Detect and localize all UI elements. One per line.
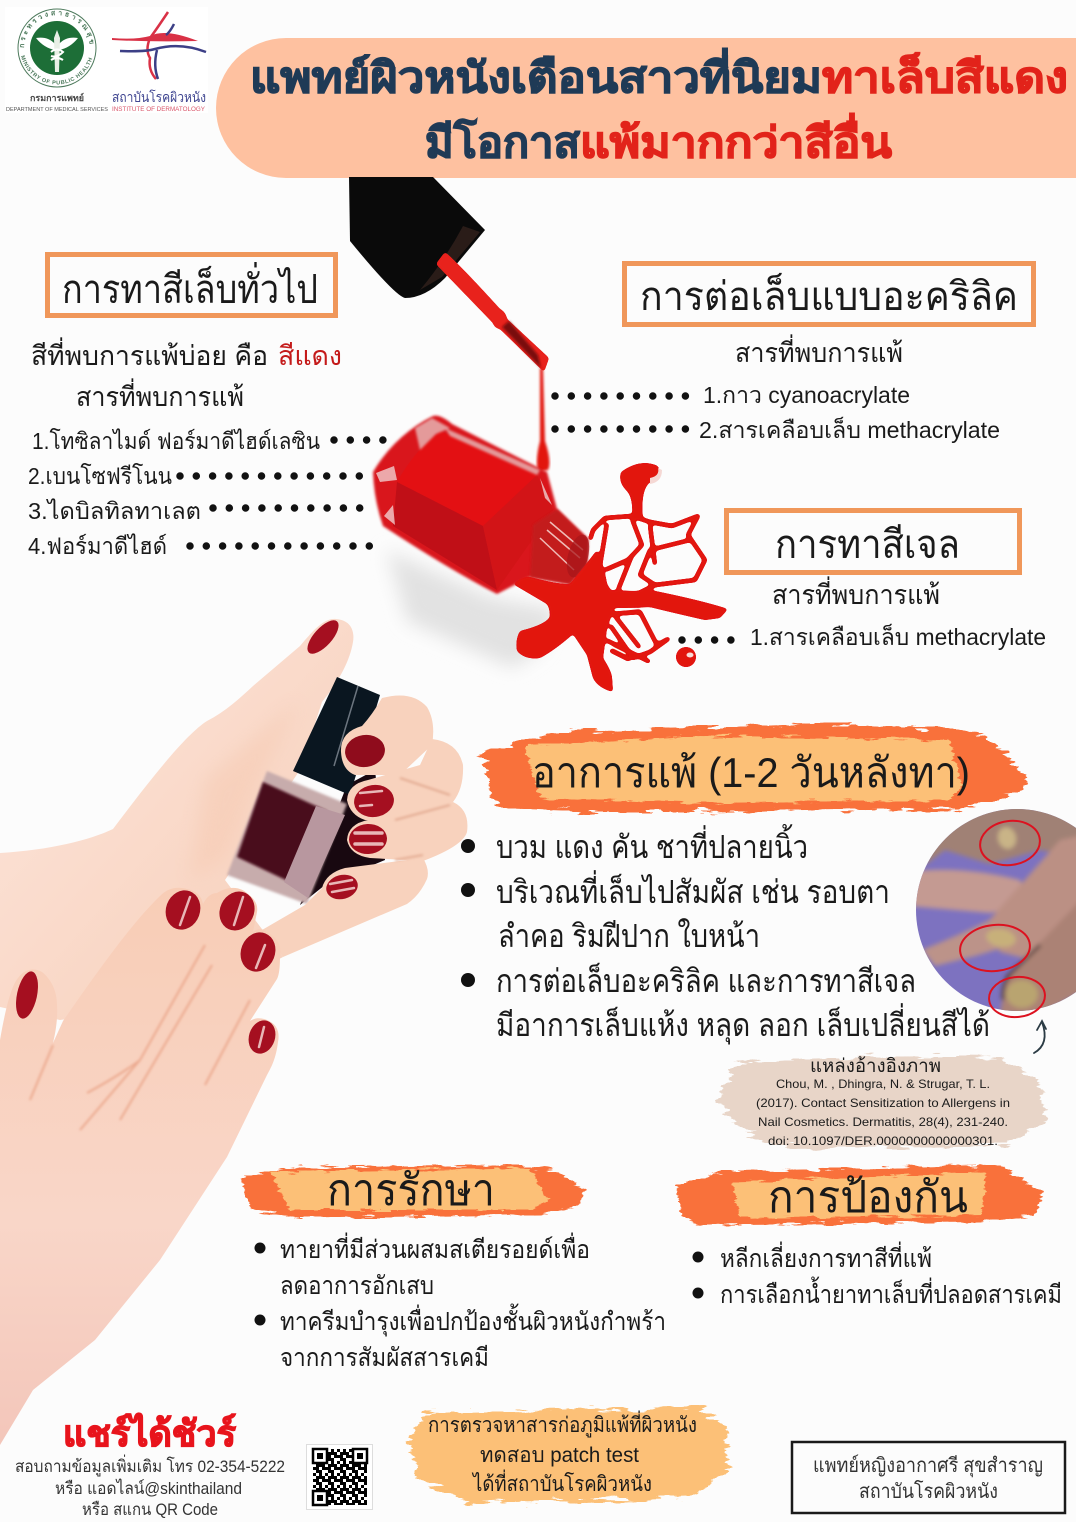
logo: ministry of public health: กรมการแพทย์ (30, 92, 84, 103)
title banner: มีโอกาส (425, 118, 580, 166)
image reference (717, 1056, 1048, 1148)
treatment list: ทายาที่มีส่วนผสมสเตียรอยด์เพื่อ (280, 1232, 590, 1264)
dark shadow between fingers (300, 770, 385, 905)
callout: patch test: ได้ที่สถาบันโรคผิวหนัง (471, 1469, 652, 1496)
spill: main blob (513, 550, 617, 692)
nail highlights (180, 791, 382, 1047)
palm shading (190, 700, 300, 880)
treatment list (254, 1232, 666, 1372)
symptoms list (461, 824, 990, 1045)
text block: general polish allergens: 4.ฟอร์มาดีไฮด์ (28, 533, 167, 559)
banner: prevention heading (676, 1165, 1043, 1225)
text block: general polish allergens (28, 337, 342, 559)
text block: general polish allergens: 1.โทซิลาไมด์ ฟอร์มาดีไฮด์เลซิน (32, 428, 320, 454)
image reference: แหล่งอ้างอิงภาพ (810, 1056, 941, 1077)
text block: acrylic allergens: 1.กาว cyanoacrylate (703, 382, 910, 408)
callout: patch test: ทดสอบ patch test (480, 1444, 639, 1467)
text block: general polish allergens: 3.ไดบิลทิลทาเลต (28, 498, 201, 524)
finger creases (30, 945, 250, 1130)
logo: ministry of public health: DEPARTMENT OF MEDICAL SERVICES (6, 107, 108, 113)
footer contact block: หรือ สแกน QR Code (82, 1500, 218, 1519)
spill: top drop (620, 463, 660, 520)
dotted leaders (180, 396, 733, 640)
title banner: แพทย์ผิวหนังเตือนสาวที่นิยม (250, 48, 822, 101)
finger shading (395, 778, 450, 860)
treatment list: ทาครีมบำรุงเพื่อปกป้องชั้นผิวหนังกำพร้า (280, 1303, 666, 1337)
footer contact block (15, 1412, 285, 1519)
author box: สถาบันโรคผิวหนัง (859, 1480, 998, 1503)
QR code (306, 1444, 372, 1510)
prevention list (692, 1241, 1062, 1309)
text block: gel allergens (750, 576, 1046, 650)
brush cap (349, 177, 485, 298)
logo: institute of dermatology (112, 12, 206, 113)
text block: acrylic allergens: 2.สารเคลือบเล็บ methacrylate (699, 415, 1000, 443)
heading box: gel polish (726, 510, 1020, 572)
symptoms list: มีอาการเล็บแห้ง หลุด ลอก เล็บเปลี่ยนสีได้ (496, 1003, 990, 1045)
symptoms list: ลำคอ ริมฝีปาก ใบหน้า (498, 918, 760, 954)
title banner: แพ้มากกว่าสีอื่น (580, 113, 892, 166)
text block: general polish allergens: 2.เบนโซฟรีโนน (28, 463, 172, 489)
logo: ministry of public health: MINISTRY OF PUBLIC HEALTH (21, 55, 92, 84)
title banner (216, 38, 1076, 178)
banner: symptoms heading (482, 724, 1028, 812)
held bottle cap (293, 677, 380, 795)
photo: nails with contact allergy (916, 809, 1076, 1018)
fingers over bottle (262, 695, 467, 957)
symptoms list: บวม แดง คัน ชาที่ปลายนิ้ว (496, 824, 808, 865)
author box (792, 1442, 1065, 1513)
banner: treatment heading: การรักษา (327, 1166, 495, 1215)
spill shapes (513, 463, 728, 692)
callout: patch test: การตรวจหาสารก่อภูมิแพ้ที่ผิวหนัง (428, 1410, 697, 1438)
lower hand (0, 888, 280, 1445)
nail polish brush and spilled bottle illustration (349, 177, 728, 692)
text block: gel allergens: สารที่พบการแพ้ (772, 576, 940, 610)
image reference: Nail Cosmetics. Dermatitis, 28(4), 231-240. (758, 1115, 1008, 1129)
banner: treatment heading (241, 1165, 585, 1218)
image reference: Chou, M. , Dhingra, N. & Strugar, T. L. (776, 1077, 990, 1091)
logo: ministry of public health (6, 8, 108, 113)
text block: general polish allergens: สารที่พบการแพ้ (76, 378, 244, 412)
image reference: (2017). Contact Sensitization to Allergens in (756, 1096, 1010, 1110)
symptoms list: บริเวณที่เล็บไปสัมผัส เช่น รอบตา (496, 870, 890, 910)
arrow to photo (1034, 1021, 1046, 1053)
spill: web strands (590, 516, 705, 600)
symptoms list: การต่อเล็บอะคริลิค และการทาสีเจล (496, 962, 916, 999)
heading box: acrylic nails (624, 264, 1034, 324)
photo: hands holding polish bottle (0, 615, 467, 1445)
footer contact block: สอบถามข้อมูลเพิ่มเติม โทร 02-354-5222 (15, 1454, 285, 1477)
callout: patch test (407, 1407, 728, 1503)
glass highlights (415, 418, 540, 475)
held bottle (227, 771, 347, 904)
text block: gel allergens: 1.สารเคลือบเล็บ methacrylate (750, 622, 1046, 650)
heading box: general polish: การทาสีเล็บทั่วไป (62, 262, 318, 312)
treatment list: ลดอาการอักเสบ (280, 1272, 434, 1300)
logo: ministry of public health: กระทรวงสาธารณสุข (20, 10, 94, 48)
drip (537, 368, 549, 472)
red circles (958, 817, 1047, 1020)
banner: prevention heading: การป้องกัน (768, 1173, 968, 1222)
author box: แพทย์หญิงอากาศรี สุขสำราญ (813, 1454, 1043, 1478)
treatment list: จากการสัมผัสสารเคมี (280, 1344, 489, 1372)
image reference: doi: 10.1097/DER.0000000000000301. (768, 1134, 998, 1148)
footer contact block: หรือ แอดไลน์@skinthailand (55, 1478, 242, 1498)
footer contact block: แชร์ได้ชัวร์ (63, 1412, 237, 1454)
logo: institute of dermatology: สถาบันโรคผิวหนัง (112, 89, 206, 105)
logos (6, 8, 206, 113)
nails (12, 615, 396, 1057)
bottle neck (530, 509, 588, 584)
text block: acrylic allergens: สารที่พบการแพ้ (735, 334, 903, 368)
bottle shadow (387, 550, 560, 668)
heading box: general polish (48, 254, 336, 316)
upper hand (0, 619, 353, 1020)
text block: acrylic allergens (699, 334, 1000, 443)
title banner: ทาเล็บสีแดง (822, 52, 1068, 101)
logo: institute of dermatology: INSTITUTE OF DERMATOLOGY (112, 107, 205, 113)
banner: symptoms heading: อาการแพ้ (1-2 วันหลังทา) (532, 749, 970, 796)
text block: general polish allergens: สีแดง (278, 341, 342, 371)
bottle body (373, 416, 588, 594)
brush (436, 252, 549, 372)
text block: general polish allergens: สีที่พบการแพ้บ่อย คือ (31, 337, 268, 371)
heading box: acrylic nails: การต่อเล็บแบบอะคริลิค (640, 272, 1018, 319)
heading box: gel polish: การทาสีเจล (775, 523, 960, 567)
prevention list: หลีกเลี่ยงการทาสีที่แพ้ (720, 1241, 932, 1273)
